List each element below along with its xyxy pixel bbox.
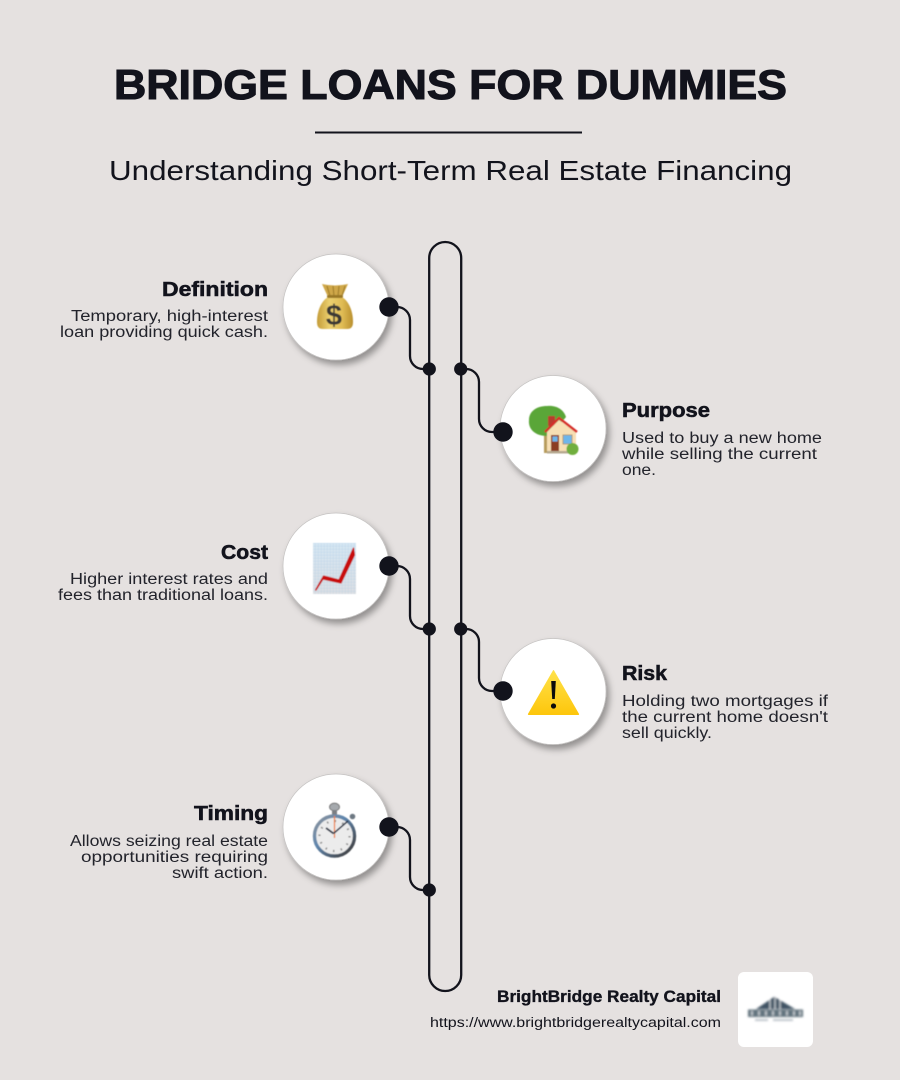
panel: purpose (454, 362, 822, 482)
subtitle: Understanding Short-Term Real Estate Financing (109, 155, 792, 186)
logo (738, 972, 813, 1047)
panel: cost (58, 513, 436, 636)
connector: timing (379, 817, 436, 897)
timing text: Allows seizing real estate (70, 833, 268, 850)
risk text: the current home doesn't (622, 709, 829, 726)
definition circle (283, 254, 389, 360)
purpose text: one. (622, 462, 656, 479)
icon: stopwatch (314, 803, 355, 856)
risk text (622, 693, 829, 742)
definition text: Temporary, high-interest (71, 308, 269, 325)
connector: definition (379, 297, 436, 376)
panel: risk (454, 622, 829, 744)
timing circle (283, 774, 389, 880)
definition heading: Definition (162, 279, 268, 301)
cost text (58, 571, 268, 604)
panel: definition (60, 254, 436, 376)
definition text (60, 308, 269, 341)
central bridge track (429, 242, 461, 991)
timing text: swift action. (172, 865, 268, 882)
cost heading: Cost (221, 542, 268, 564)
footer url: https://www.brightbridgerealtycapital.com (430, 1015, 721, 1030)
cost circle (283, 513, 389, 619)
icon: money bag: $ (326, 300, 342, 332)
purpose text: Used to buy a new home (622, 430, 822, 447)
purpose text (621, 430, 822, 479)
purpose text: while selling the current (621, 446, 818, 463)
risk text: sell quickly. (622, 725, 712, 742)
timing text: opportunities requiring (81, 849, 268, 866)
cost text: fees than traditional loans. (58, 587, 268, 604)
panel: timing (70, 774, 436, 897)
connector: risk (454, 622, 513, 701)
risk text: Holding two mortgages if (622, 693, 829, 710)
purpose circle (500, 376, 606, 482)
icon: rising chart (313, 543, 356, 594)
footer company name: BrightBridge Realty Capital (497, 988, 721, 1006)
definition text: loan providing quick cash. (60, 324, 268, 341)
icon: money bag (317, 284, 353, 332)
timing heading: Timing (194, 803, 268, 825)
risk heading: Risk (622, 663, 668, 685)
connector: cost (379, 556, 436, 636)
icon: house with tree (529, 406, 578, 455)
connector: purpose (454, 362, 513, 442)
risk circle (500, 638, 606, 744)
title: BRIDGE LOANS FOR DUMMIES (114, 61, 787, 108)
timing text (70, 833, 268, 882)
cost text: Higher interest rates and (70, 571, 268, 588)
icon: warning sign (528, 670, 579, 714)
purpose heading: Purpose (622, 400, 710, 422)
